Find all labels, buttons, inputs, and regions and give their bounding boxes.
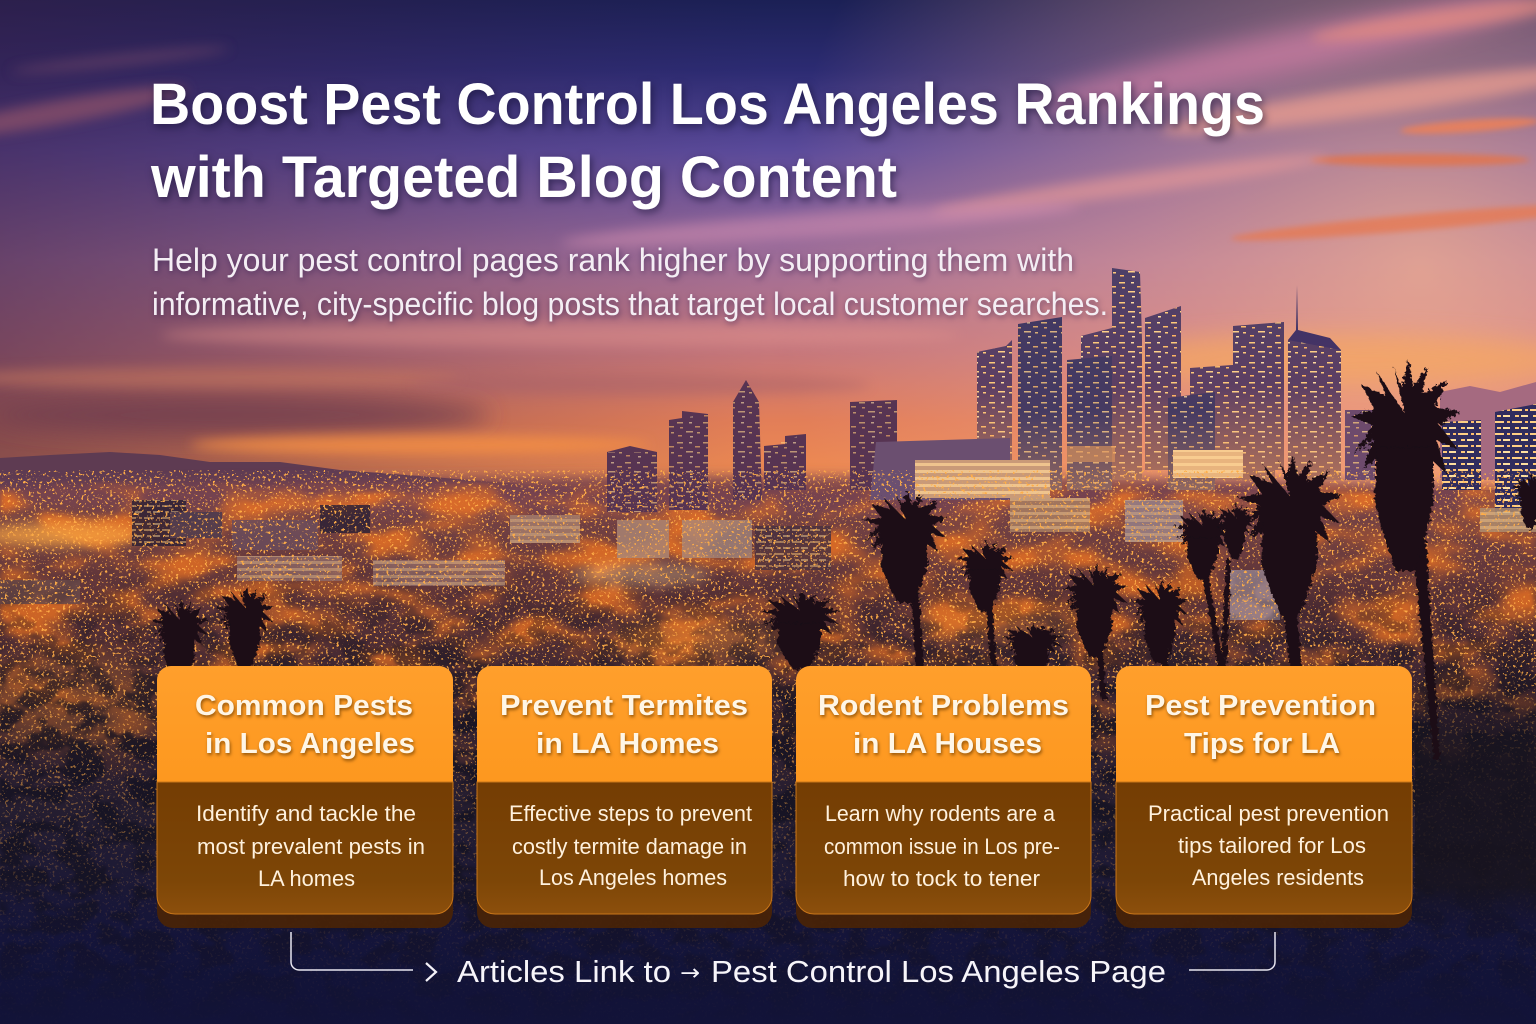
skyline: downtown towers xyxy=(977,268,1536,515)
footer link text: Articles Link to xyxy=(457,954,671,989)
skyline: midtown towers xyxy=(607,380,1050,512)
panel: Rodent Problems in LA Houses xyxy=(796,666,1091,928)
mid-ground: scattered city lights xyxy=(0,470,1536,1024)
card description: how to tock to tener xyxy=(843,866,1041,891)
card heading: Rodent Problems xyxy=(818,690,1069,722)
card description: Effective steps to prevent xyxy=(509,801,753,826)
subtitle: Help your pest control pages rank higher by supporting them with xyxy=(152,242,1074,278)
footer link text xyxy=(457,954,1166,989)
subtitle: informative, city-specific blog posts that target local customer searches. xyxy=(152,286,1108,322)
mid-ground: dark trees and rooftops xyxy=(0,570,1536,969)
card heading: in Los Angeles xyxy=(205,728,415,760)
card description xyxy=(509,801,753,890)
card heading: Tips for LA xyxy=(1184,728,1340,760)
background: lit city ground xyxy=(0,468,1536,880)
card description: Practical pest prevention xyxy=(1148,801,1389,826)
card description: Learn why rodents are a xyxy=(825,801,1055,826)
card heading xyxy=(818,690,1069,760)
card description: costly termite damage in xyxy=(512,834,747,859)
card heading: in LA Homes xyxy=(536,728,719,760)
card heading xyxy=(1145,690,1376,760)
card heading xyxy=(500,690,748,760)
card description: LA homes xyxy=(258,866,355,891)
card description: Los Angeles homes xyxy=(539,865,727,890)
card description xyxy=(1148,801,1389,890)
icon: chevron xyxy=(426,963,436,981)
background: distant mountains xyxy=(0,382,1536,520)
subtitle xyxy=(152,242,1108,322)
background: sunset sky xyxy=(0,0,1536,500)
mid-ground: low-rise buildings xyxy=(0,498,1536,620)
card heading: in LA Houses xyxy=(853,728,1042,760)
foreground: dark tree mass at lower right xyxy=(1415,670,1536,960)
panel: Common Pests in Los Angeles xyxy=(157,666,453,928)
panel: Pest Prevention Tips for LA xyxy=(1116,666,1412,928)
foreground: bottom vignette xyxy=(0,880,1536,1024)
card heading xyxy=(195,690,415,760)
footer link text: → xyxy=(680,961,700,986)
arrow: right connector line xyxy=(1189,932,1275,970)
card heading: Prevent Termites xyxy=(500,690,748,722)
title: Boost Pest Control Los Angeles Rankings xyxy=(150,72,1265,137)
card description: Identify and tackle the xyxy=(196,801,416,826)
footer link text: Pest Control Los Angeles Page xyxy=(711,954,1166,989)
title: with Targeted Blog Content xyxy=(150,145,897,210)
foreground: palm trees xyxy=(151,360,1536,760)
card description xyxy=(196,801,425,891)
card description: Angeles residents xyxy=(1192,865,1364,890)
card description xyxy=(824,801,1060,891)
arrow: left connector line xyxy=(291,932,413,970)
card description: common issue in Los pre- xyxy=(824,834,1060,859)
card heading: Common Pests xyxy=(195,690,413,722)
title xyxy=(150,72,1265,210)
card description: tips tailored for Los xyxy=(1178,833,1366,858)
card description: most prevalent pests in xyxy=(197,834,425,859)
card heading: Pest Prevention xyxy=(1145,690,1376,722)
panel: Prevent Termites in LA Homes xyxy=(477,666,772,928)
